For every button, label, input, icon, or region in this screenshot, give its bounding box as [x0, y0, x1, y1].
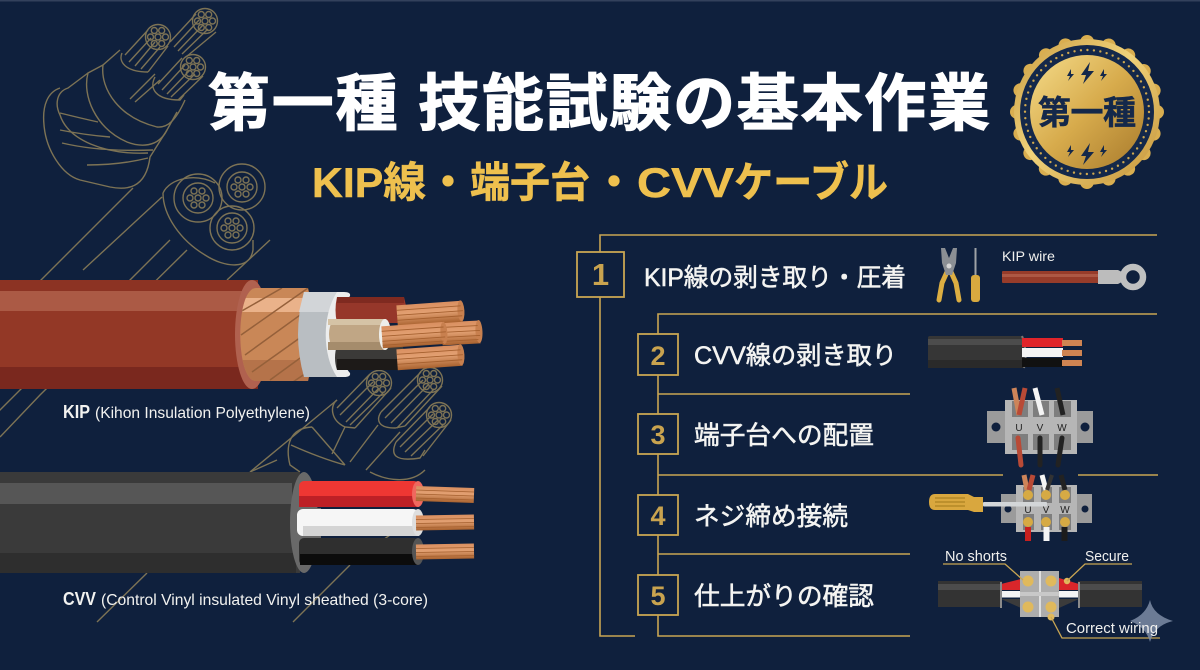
- step 4 number box: [638, 495, 678, 535]
- step 1 number box: [577, 252, 624, 297]
- step 5: [638, 549, 1173, 642]
- callout: Secure: Secure: [1085, 549, 1129, 565]
- step 4: [638, 475, 1092, 541]
- KIP wire label: KIP wire: [1002, 248, 1055, 264]
- title: 第一種 技能試験の基本作業: [208, 70, 990, 139]
- icon: small CVV cable: [928, 336, 1082, 368]
- subtitle: ケーブル: [734, 159, 888, 206]
- callout: Correct wiring: [1051, 600, 1173, 642]
- subtitle: ・: [427, 159, 469, 206]
- CVV label: CVV: [63, 589, 96, 609]
- step 5 number box: [638, 575, 678, 615]
- icon: KIP wire with ring terminal: [1002, 267, 1143, 287]
- subtitle: [312, 159, 888, 206]
- icon: terminal block with wires: U: [1015, 423, 1023, 434]
- icon: terminal block with wires: V: [1037, 423, 1044, 434]
- icon: finished joint: [938, 571, 1142, 620]
- step 1 number box: 1: [592, 257, 609, 292]
- step 2 number box: 2: [650, 341, 666, 371]
- icon: terminal block with wires: [987, 388, 1093, 465]
- step 3 text: 端子台への配置: [694, 422, 874, 450]
- KIP red core: [336, 297, 407, 323]
- step 1: [577, 248, 1143, 302]
- step 2 number box: [638, 334, 678, 375]
- steps frame lines: [600, 235, 1158, 636]
- subtitle: ・: [593, 159, 635, 206]
- icon: terminal block with screwdriver: [929, 475, 1092, 541]
- callout: No shorts: No shorts: [945, 549, 1007, 565]
- KIP tan core: [328, 319, 391, 350]
- step 5 text: 仕上がりの確認: [694, 583, 874, 611]
- CVV cable illustration: [0, 472, 474, 573]
- step 1 text: KIP線の剥き取り・圧着: [644, 264, 906, 292]
- icon: terminal block with wires: W: [1057, 423, 1067, 434]
- callout: Secure: [1067, 549, 1132, 581]
- icon: screwdriver: [971, 248, 980, 302]
- sparkle: [1130, 600, 1173, 642]
- subtitle: KIP線: [312, 159, 426, 206]
- CVV white core: [297, 509, 424, 536]
- KIP cable illustration: [0, 280, 483, 389]
- step 4 text: ネジ締め接続: [694, 503, 848, 531]
- icon: terminal block with screwdriver: W: [1060, 505, 1070, 516]
- background line art: cable illustrations: [0, 8, 452, 622]
- step 4 number box: 4: [650, 501, 666, 531]
- step 2: [638, 334, 1082, 375]
- CVV red core: [299, 481, 424, 507]
- subtitle: 端子台: [470, 159, 590, 206]
- icon: pliers: [939, 248, 959, 300]
- step 5 number box: 5: [650, 581, 666, 611]
- icon: terminal block with screwdriver: V: [1043, 505, 1050, 516]
- callout: Correct wiring: Correct wiring: [1066, 621, 1158, 637]
- badge: 第一種 gold medal: [1014, 39, 1160, 185]
- step 3 number box: [638, 414, 678, 454]
- KIP copper strands: [381, 300, 483, 370]
- step 2 text: CVV線の剥き取り: [694, 342, 897, 370]
- step 3 number box: 3: [650, 420, 666, 450]
- KIP label: KIP: [63, 402, 90, 422]
- CVV black core: [299, 538, 424, 565]
- CVV label: (Control Vinyl insulated Vinyl sheathed (3-core): [101, 592, 428, 609]
- step 3: [638, 388, 1093, 465]
- callout: No shorts: [943, 549, 1023, 580]
- KIP label: (Kihon Insulation Polyethylene): [95, 405, 310, 422]
- KIP black core: [335, 345, 407, 370]
- icon: terminal block with screwdriver: U: [1024, 505, 1032, 516]
- CVV copper strands: [416, 486, 474, 560]
- subtitle: CVV: [637, 159, 734, 206]
- badge text: 第一種: [1038, 94, 1136, 131]
